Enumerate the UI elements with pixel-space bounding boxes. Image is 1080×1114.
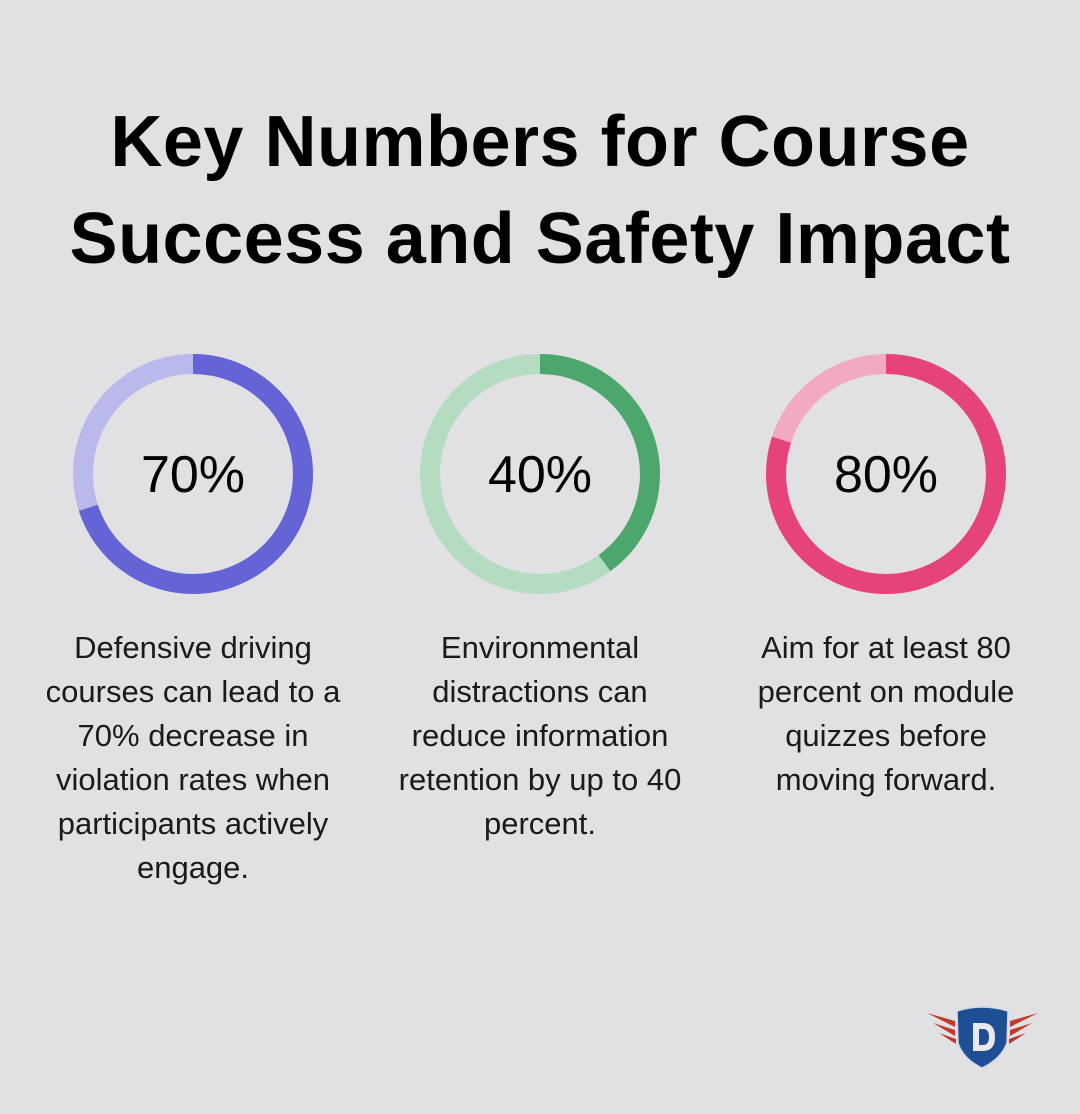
text: 70% — [46, 630, 340, 885]
panel: 70% — [73, 354, 313, 594]
donut chart 70% — [73, 354, 313, 594]
text: 40%: distractions can — [432, 674, 648, 709]
text: 40%: Environmental — [441, 630, 639, 665]
text: 80% — [758, 630, 1014, 797]
donut chart 70%: 70% — [141, 446, 245, 504]
donut chart 80% — [766, 354, 1006, 594]
donut chart 40% — [420, 354, 660, 594]
icon: logo — [927, 1006, 1038, 1068]
title: Key Numbers for Course — [110, 102, 970, 182]
donut chart 80%: 80% — [834, 446, 938, 504]
text: 70%: engage. — [137, 850, 249, 885]
donut chart 40%: 40% — [488, 446, 592, 504]
panel: 80% — [766, 354, 1006, 594]
text: 40%: reduce information — [412, 718, 668, 753]
text: 70%: participants actively — [58, 806, 328, 841]
text: 70%: violation rates when — [56, 762, 330, 797]
text: 80%: Aim for at least 80 — [761, 630, 1011, 665]
panel: 40% — [420, 354, 660, 594]
text: 40%: percent. — [484, 806, 596, 841]
text: 80%: quizzes before — [785, 718, 987, 753]
text: 80%: percent on module — [758, 674, 1014, 709]
title — [70, 102, 1010, 279]
text: 70%: courses can lead to a — [46, 674, 340, 709]
text: 40% — [399, 630, 681, 841]
title: Success and Safety Impact — [70, 199, 1010, 279]
text: 80%: moving forward. — [776, 762, 996, 797]
text: 40%: retention by up to 40 — [399, 762, 681, 797]
text: 70%: 70% decrease in — [78, 718, 308, 753]
text: 70%: Defensive driving — [74, 630, 312, 665]
